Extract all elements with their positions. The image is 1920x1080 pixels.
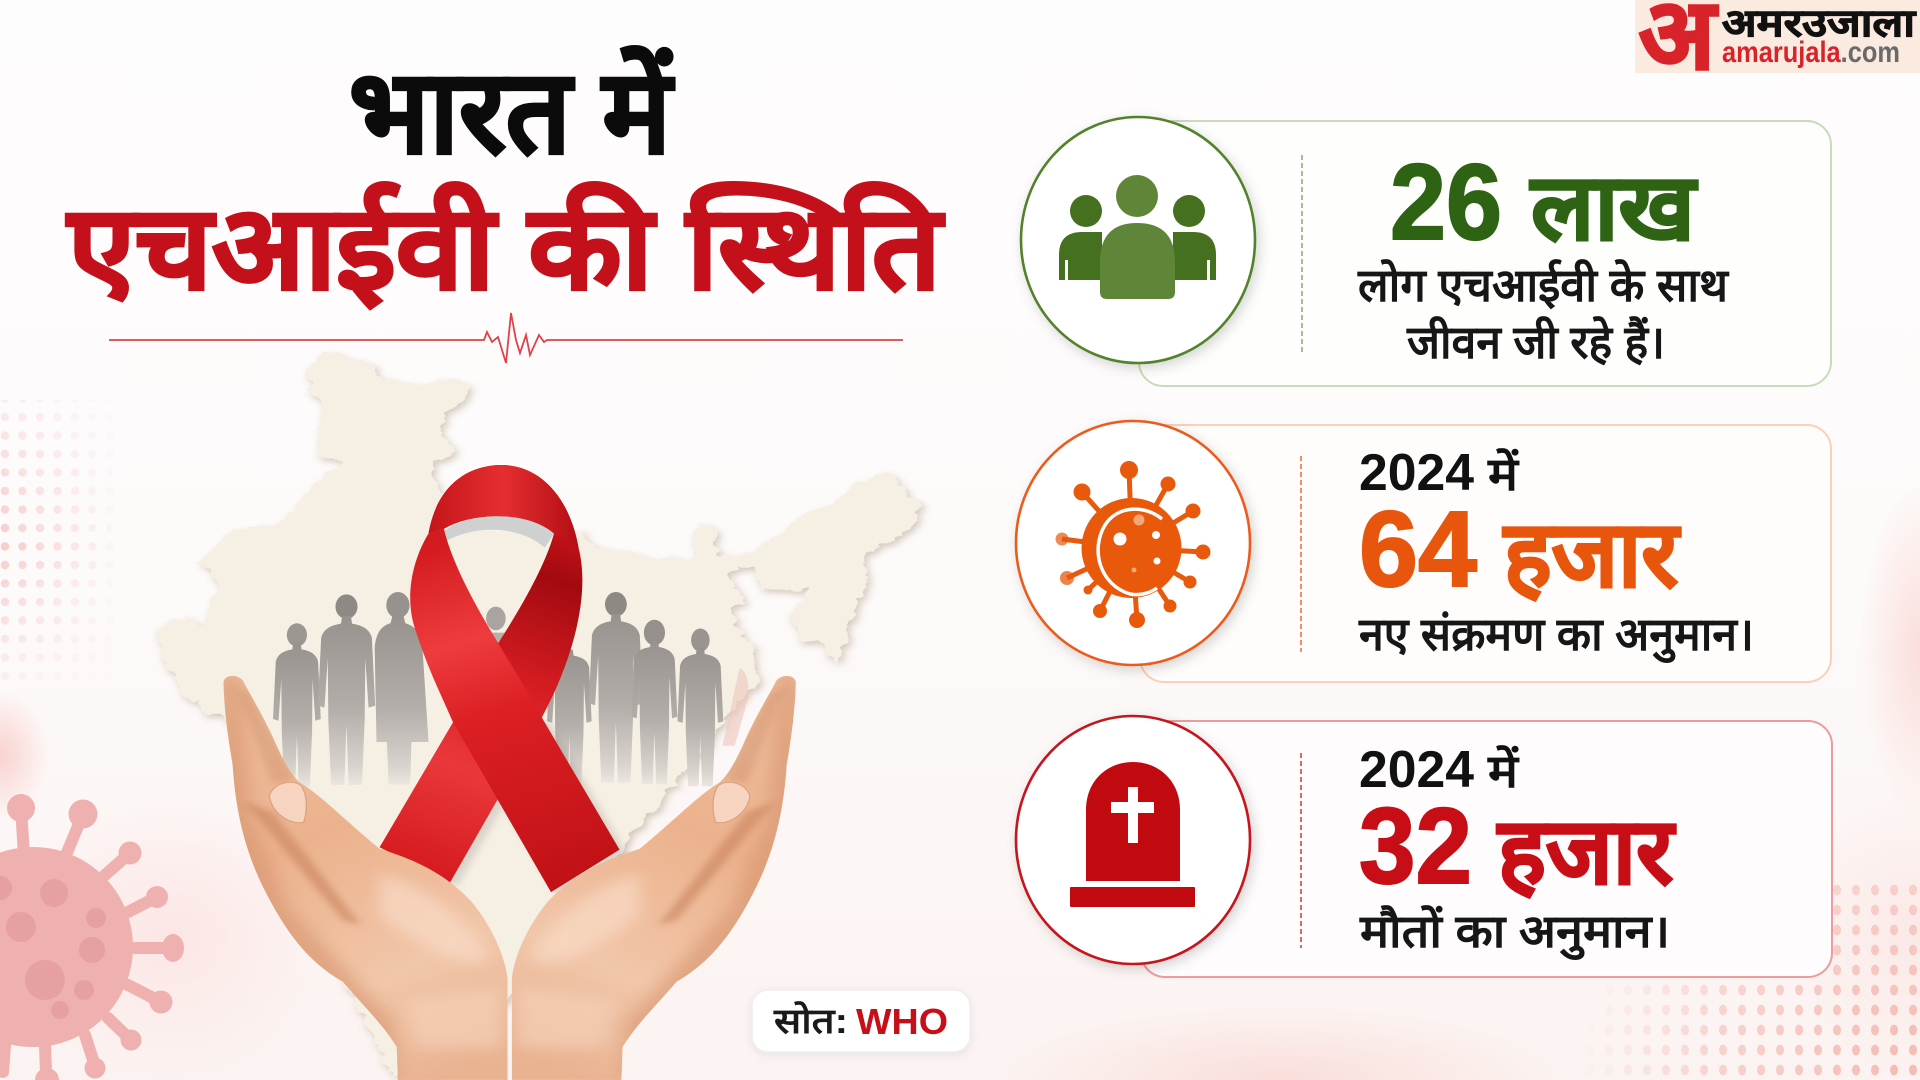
people silhouettes [273,592,748,787]
right hand [505,670,805,1080]
panel: 26 लाख people living with HIV [1021,117,1831,386]
stat: 26 लाख: 26 [1390,141,1502,262]
text: 2024 में: 2024 [1359,444,1474,502]
icon circle: gravestone [1016,716,1250,964]
left hand [214,670,514,1080]
person 5 [547,650,592,785]
source badge: WHO [856,1001,948,1042]
stat: 64 हजार: 64 [1359,488,1477,609]
logo: Amar Ujala: अमरउजाला [1722,3,1916,45]
logo: Amar Ujala: amarujala.com [1722,36,1900,69]
source badge: सोत: [773,1001,848,1041]
icon: decorative virus bottom-left [0,794,184,1080]
source badge [752,990,970,1052]
icon circle: people [1021,117,1255,363]
person 2 [318,594,375,785]
stat: 26 लाख [1390,141,1698,262]
text: 2024 में: में [1487,448,1520,500]
title: एचआईवी की स्थिति: एचआईवी की स्थिति [66,182,945,313]
panel: 64 हजार new infections [1016,421,1831,682]
stat: 32 हजार: 32 [1359,785,1472,906]
text: मौतों का अनुमान: मौतों का अनुमान। [1359,905,1670,961]
red ribbon [380,465,627,896]
divider [1300,753,1302,948]
icon circle: virus [1016,421,1250,665]
stat: 32 हजार: हजार [1496,801,1676,903]
title: भारत में: भारत में [349,46,675,177]
text: लोग एचआईवी के साथ जीवन जी रहे हैं: लोग एचआईवी के साथ [1357,259,1730,311]
person 8 [677,629,723,786]
logo: Amar Ujala [1635,0,1920,89]
stat: 64 हजार [1359,488,1681,609]
divider [1300,456,1302,652]
person 1 [273,623,321,787]
heartbeat divider [109,313,903,363]
stat: 64 हजार: हजार [1502,504,1681,606]
stat: 26 लाख: लाख [1529,157,1698,259]
text: नए संक्रमण का अनुमान: नए संक्रमण का अनुमान। [1358,608,1754,664]
person 6 [589,592,643,783]
divider [1301,155,1303,353]
panel: 32 हजार deaths [1016,716,1832,977]
person 4 [484,607,511,708]
person 7 [632,620,677,784]
stat: 32 हजार [1359,785,1676,906]
map of India [156,352,918,1076]
text: लोग एचआईवी के साथ जीवन जी रहे हैं: जीवन जी रहे हैं। [1406,316,1665,368]
faded person [722,668,748,746]
person 3 [375,592,429,785]
map of India with people and ribbon [156,352,918,1080]
text: लोग एचआईवी के साथ जीवन जी रहे हैं [1357,259,1730,368]
text: 2024 में: 2024 [1359,741,1474,799]
hands [214,670,805,1080]
text: 2024 में: में [1487,745,1520,797]
